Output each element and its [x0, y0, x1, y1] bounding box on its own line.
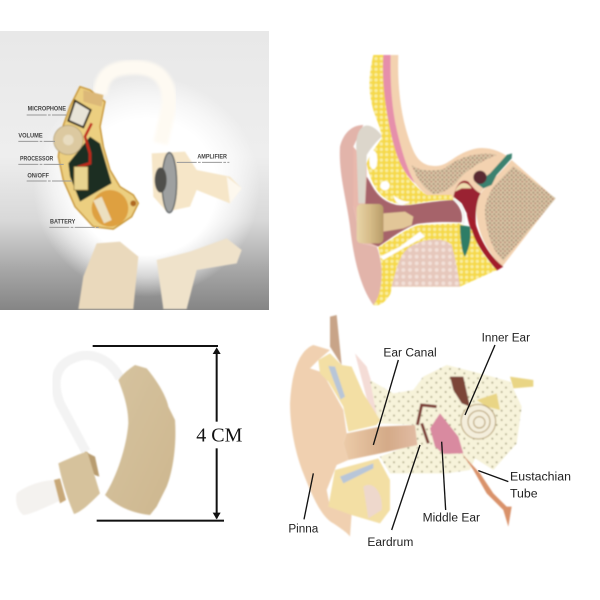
- label: on/off: ON/OFF: [27, 174, 49, 180]
- label: battery: [49, 219, 100, 227]
- pink stripe: [382, 55, 415, 183]
- middle ear: [430, 413, 463, 454]
- label: inner ear: Inner Ear: [482, 331, 530, 345]
- gland: [363, 485, 382, 518]
- pink tissue: [355, 353, 383, 423]
- skull strip: [330, 315, 342, 365]
- panel: hearing aid size: [16, 345, 243, 522]
- measurement label: 4 CM: [196, 425, 243, 447]
- reflection: earpiece: [157, 238, 242, 309]
- upper tissue: [318, 353, 380, 432]
- gland: [392, 240, 460, 287]
- ear canal: [363, 177, 462, 247]
- nerve: [477, 377, 533, 410]
- label: microphone: MICROPHONE: [28, 107, 66, 113]
- reflection: hearing aid body: [78, 242, 138, 309]
- top measure line: [93, 345, 218, 347]
- device body: [105, 365, 175, 515]
- semicircular canals: [450, 377, 470, 407]
- label: amplifier: [177, 155, 229, 162]
- measure arrow: [213, 347, 221, 519]
- pointer lines: [304, 345, 508, 530]
- label: eustachian tube: Tube: [510, 486, 538, 500]
- panel: hearing aid components: [0, 31, 269, 310]
- eardrum: [453, 199, 464, 224]
- label: microphone: [27, 107, 67, 115]
- bottom measure line: [97, 520, 224, 522]
- label: eustachian tube: Eustachian: [510, 470, 571, 484]
- label: volume: [18, 134, 55, 141]
- red membrane: [467, 213, 503, 271]
- panel: ear cross-section with hearing aid: [340, 55, 556, 305]
- temporal bone: [370, 365, 522, 473]
- label: on/off: [27, 174, 73, 181]
- middle ear cavity: [453, 181, 481, 227]
- hearing aid: body: [357, 204, 383, 243]
- cochlea: [461, 404, 496, 439]
- earpiece collar: [54, 478, 66, 503]
- tissue cavities: [369, 151, 410, 204]
- label: volume: VOLUME: [18, 134, 43, 140]
- eartip: [16, 480, 62, 515]
- bone strips: [380, 232, 425, 260]
- tissue highlights: [340, 463, 373, 483]
- label: eardrum: Eardrum: [367, 535, 413, 549]
- label: battery: BATTERY: [50, 219, 75, 225]
- label: processor: PROCESSOR: [20, 157, 54, 163]
- speckled bone: [412, 154, 497, 194]
- icon: amplifier earpiece: [152, 152, 242, 213]
- eustachian tube: [462, 453, 512, 527]
- outer ear: [290, 345, 352, 537]
- ear canal: [343, 425, 417, 460]
- skin and upper bone: [390, 55, 510, 198]
- eustachian tube: [460, 225, 471, 257]
- eardrum area: [417, 405, 437, 443]
- hearing aid: tip: [383, 212, 413, 232]
- label: processor: [18, 157, 65, 164]
- label: middle ear: Middle Ear: [423, 511, 480, 525]
- label: amplifier: AMPLIFIER: [197, 155, 228, 161]
- lower tissue: [328, 458, 390, 523]
- earpiece drum: [58, 452, 100, 514]
- inner ear: [473, 153, 512, 188]
- hearing aid: hook and tube: [356, 125, 382, 203]
- panel: anatomy of the ear: [288, 315, 571, 549]
- icon: ear hook: [100, 67, 169, 143]
- right bone: [476, 160, 555, 267]
- lower yellow tissue: [373, 223, 497, 305]
- upper yellow tissue: [367, 55, 453, 204]
- pinna: [340, 125, 383, 305]
- earpiece neck: [85, 452, 99, 477]
- label: pinna: Pinna: [288, 522, 318, 536]
- label: ear canal: Ear Canal: [383, 346, 437, 360]
- icon: opened hearing aid casing: [54, 87, 138, 229]
- ear hook: [56, 355, 120, 452]
